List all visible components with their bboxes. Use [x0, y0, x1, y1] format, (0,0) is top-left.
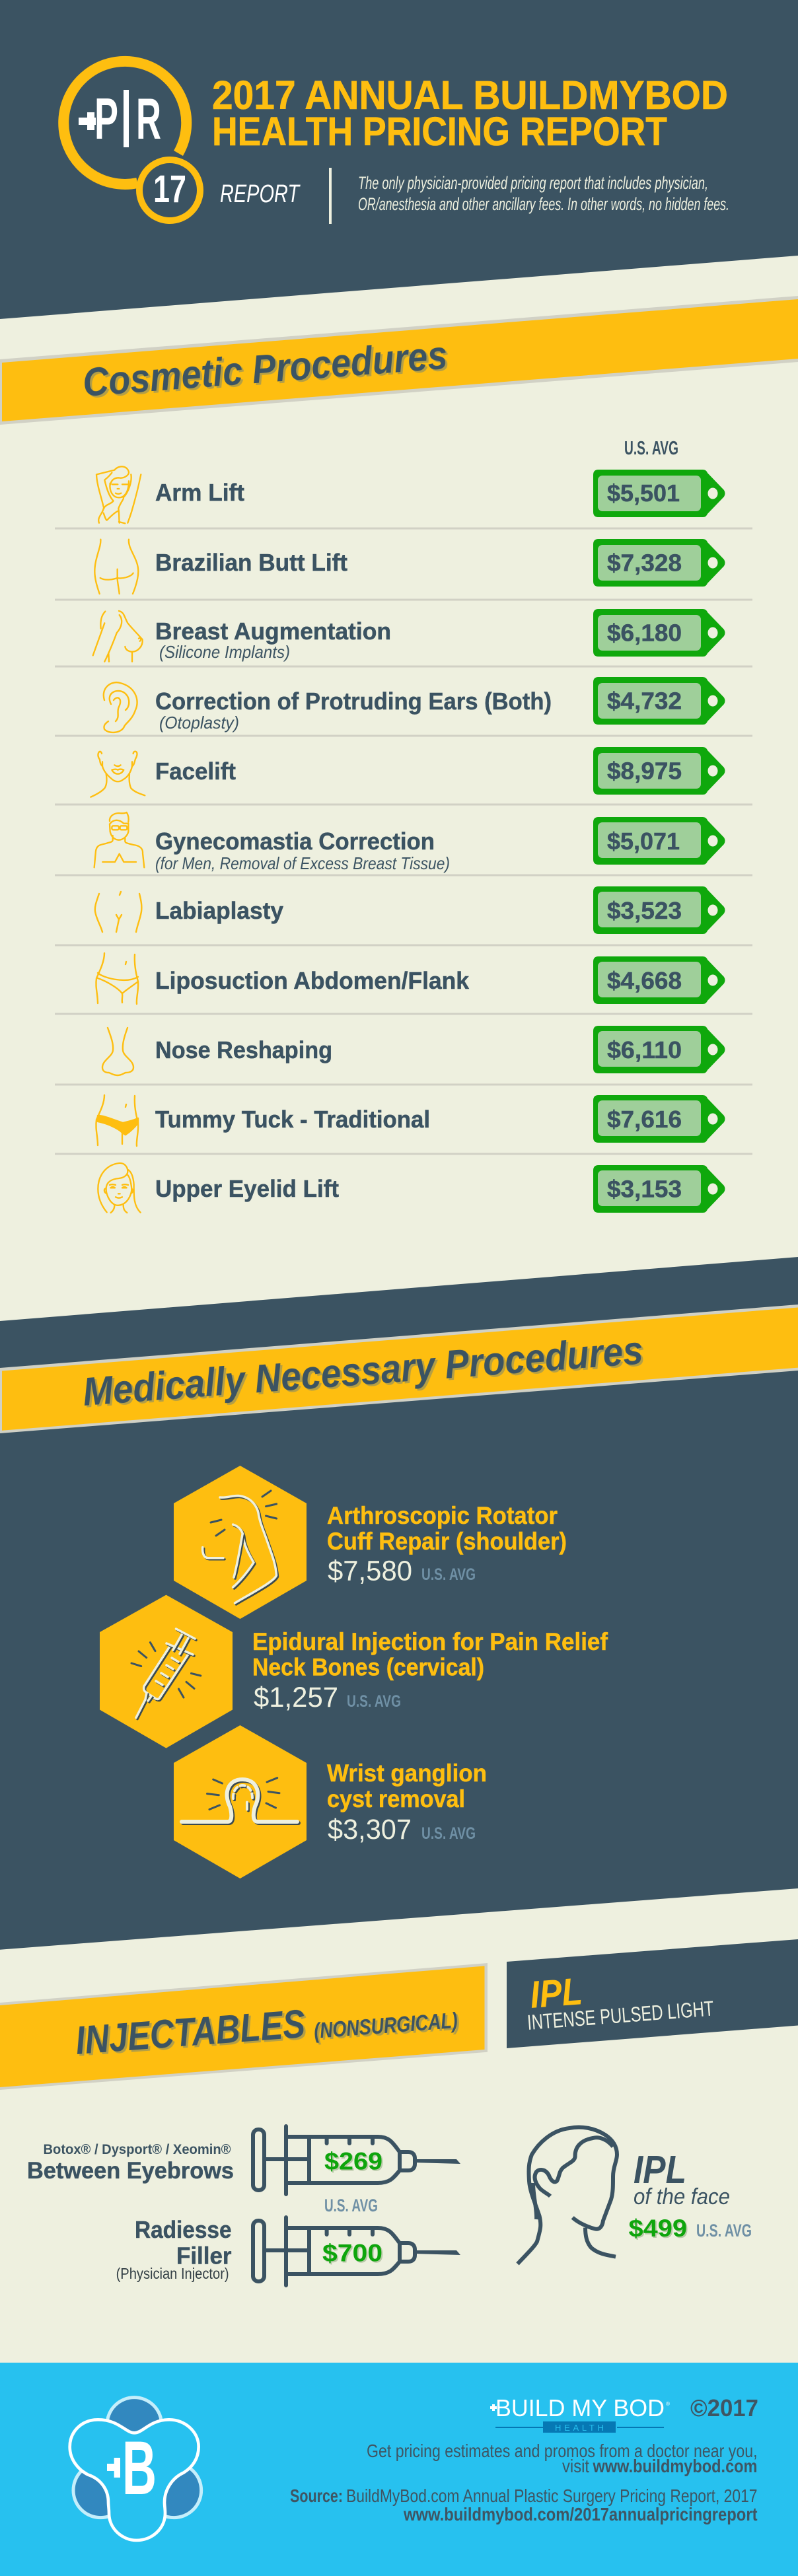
banner: Injectables: INJECTABLES [74, 2001, 307, 2063]
footer text: Source: [290, 2486, 343, 2506]
icon: syringe with price [253, 2217, 460, 2285]
icon: syringe with price: $269 [324, 2148, 382, 2174]
row: Brazilian Butt Lift [94, 539, 725, 594]
banner: Medically Necessary Procedures: Medically Necessary Procedures [81, 1328, 645, 1414]
hexagon: rotator cuff: U.S. AVG [421, 1565, 476, 1584]
price tag: $6,180 [607, 620, 682, 646]
row: Upper Eyelid Lift [98, 1163, 725, 1213]
row: Gynecomastia Correction [94, 812, 725, 873]
logo: PR ring [63, 61, 186, 184]
price tag [593, 1165, 725, 1213]
text: Arthroscopic Rotator [327, 1502, 558, 1529]
price tag: $7,616 [607, 1106, 682, 1133]
IPL of the face: of the face [634, 2184, 730, 2209]
banner: Injectables: (NONSURGICAL) [313, 2008, 458, 2043]
label: Radiesse [135, 2216, 231, 2243]
header panel [0, 0, 798, 319]
icon: nose [102, 1028, 133, 1075]
label: Upper Eyelid Lift [155, 1175, 339, 1202]
price tag [593, 539, 725, 587]
price tag: $4,668 [607, 967, 682, 994]
icon: syringe with price [253, 2126, 460, 2194]
hexagon: wrist ganglion: U.S. AVG [421, 1824, 476, 1843]
badge: 17 [139, 160, 200, 221]
icon: ear [104, 682, 137, 733]
IPL of the face: $499 [629, 2215, 687, 2242]
price tag [593, 956, 725, 1004]
label: Between Eyebrows [27, 2158, 234, 2184]
row: Correction of Protruding Ears [104, 677, 725, 733]
intro text [358, 173, 729, 214]
footer text: visit [562, 2456, 589, 2476]
icon: arm lift [96, 466, 141, 523]
price tag: $7,328 [607, 550, 682, 576]
price tag [593, 1095, 725, 1143]
title [212, 73, 728, 154]
hexagon: rotator cuff: $7,580 [328, 1555, 412, 1587]
banner: Injectables [0, 1963, 488, 2090]
banner: Cosmetic Procedures: Cosmetic Procedures [81, 333, 449, 405]
banner: Medically Necessary Procedures [0, 1305, 798, 1433]
divider [329, 168, 332, 224]
hexagon: epidural: U.S. AVG [347, 1692, 401, 1711]
hexagon: epidural [100, 1595, 608, 1748]
price tag [593, 817, 725, 865]
icon: syringe [131, 1629, 201, 1718]
icon: tummy [96, 1095, 138, 1146]
label: Tummy Tuck - Traditional [155, 1106, 430, 1133]
logo: PR ring: P [94, 86, 118, 151]
hexagon: epidural: Neck Bones (cervical) [252, 1654, 484, 1680]
IPL of the face: U.S. AVG [696, 2221, 752, 2240]
sublabel: (for Men, Removal of Excess Breast Tissue) [155, 853, 450, 873]
price tag [593, 1026, 725, 1073]
footer text: www.buildmybod.com [593, 2456, 757, 2476]
row: Breast Augmentation [93, 609, 725, 662]
hexagon: epidural: $1,257 [254, 1682, 338, 1713]
label [27, 2142, 234, 2184]
label: Arm Lift [155, 479, 244, 506]
IPL of the face [518, 2127, 752, 2264]
hexagon: wrist ganglion [174, 1725, 487, 1878]
label: Gynecomastia Correction [155, 828, 435, 855]
sublabel: (Otoplasty) [159, 713, 239, 733]
label [116, 2216, 231, 2282]
icon: buttocks [94, 540, 138, 594]
icon: breast [93, 611, 143, 662]
logo: clover B [70, 2398, 201, 2540]
sublabel: (Silicone Implants) [159, 642, 290, 662]
price tag [593, 747, 725, 795]
title: HEALTH PRICING REPORT [212, 109, 667, 154]
icon: pelvis [95, 892, 141, 932]
price tag [593, 470, 725, 517]
row: Facelift [91, 747, 725, 797]
row: Liposuction Abdomen/Flank [96, 953, 725, 1004]
price tag: $4,732 [607, 687, 682, 715]
footer panel [0, 2363, 798, 2576]
panel: medically necessary [0, 1257, 798, 1950]
label: Breast Augmentation [155, 618, 391, 645]
banner: IPL [507, 1939, 798, 2048]
logo: BuildMyBod Health: ® [666, 2401, 670, 2407]
row: Nose Reshaping [102, 1026, 725, 1075]
footer text [290, 2441, 757, 2524]
icon: male torso [94, 812, 144, 867]
logo: BuildMyBod Health: HEALTH [555, 2423, 604, 2433]
icon: abdomen [96, 953, 138, 1004]
report label: REPORT [220, 180, 301, 208]
icon: lower face [91, 752, 145, 797]
logo: PR ring: R [136, 86, 161, 151]
row: Arm Lift [96, 466, 725, 523]
banner: Cosmetic Procedures [0, 296, 798, 425]
logo: clover B: B [122, 2426, 157, 2511]
hexagon: rotator cuff: Cuff Repair (shoulder) [327, 1528, 567, 1555]
price tag: $5,501 [607, 480, 680, 507]
label: Filler [176, 2242, 231, 2269]
price tag: $8,975 [607, 757, 682, 785]
icon: head profile [518, 2127, 617, 2264]
price tag: $3,153 [607, 1176, 682, 1202]
icon: woman's face [98, 1163, 141, 1213]
price tag [593, 677, 725, 725]
price tag: $6,110 [607, 1036, 682, 1063]
logo: BuildMyBod Health [490, 2394, 670, 2433]
icon: cyst [182, 1778, 297, 1822]
label: Botox® / Dysport® / Xeomin® [44, 2142, 231, 2157]
row: Tummy Tuck [96, 1095, 725, 1146]
hexagon: rotator cuff [174, 1466, 567, 1619]
text: IPL [634, 2148, 686, 2192]
injectable: Radiesse [116, 2216, 460, 2285]
hexagon: wrist ganglion: cyst removal [327, 1785, 465, 1812]
icon: shoulder [203, 1491, 277, 1603]
price tag: $5,071 [607, 828, 680, 855]
price tag [593, 886, 725, 934]
hexagon: wrist ganglion: $3,307 [328, 1814, 412, 1845]
row: Labiaplasty [95, 886, 725, 934]
label: Brazilian Butt Lift [155, 549, 347, 576]
label: Nose Reshaping [155, 1036, 332, 1063]
price tag: $3,523 [607, 897, 682, 924]
label: Facelift [155, 758, 236, 785]
label: Correction of Protruding Ears (Both) [155, 688, 552, 715]
price tag [593, 609, 725, 657]
text: Epidural Injection for Pain Relief [252, 1628, 608, 1655]
banner: IPL: INTENSE PULSED LIGHT [526, 1996, 715, 2034]
copyright: ©2017 [690, 2394, 758, 2421]
banner: IPL: IPL [528, 1970, 584, 2017]
column heading: U.S. AVG: U.S. AVG [624, 438, 678, 459]
logo: BuildMyBod Health: BUILD MY BOD [495, 2394, 665, 2421]
text: Wrist ganglion [327, 1760, 487, 1787]
badge: 17: 17 [153, 168, 186, 211]
title: 2017 ANNUAL BUILDMYBOD [212, 73, 728, 118]
label: U.S. AVG between syringes: U.S. AVG [324, 2196, 378, 2215]
icon: syringe with price: $700 [322, 2239, 382, 2267]
injectable: Botox [27, 2126, 460, 2194]
label: (Physician Injector) [116, 2265, 229, 2282]
label: Labiaplasty [155, 897, 283, 924]
label: Liposuction Abdomen/Flank [155, 967, 470, 994]
